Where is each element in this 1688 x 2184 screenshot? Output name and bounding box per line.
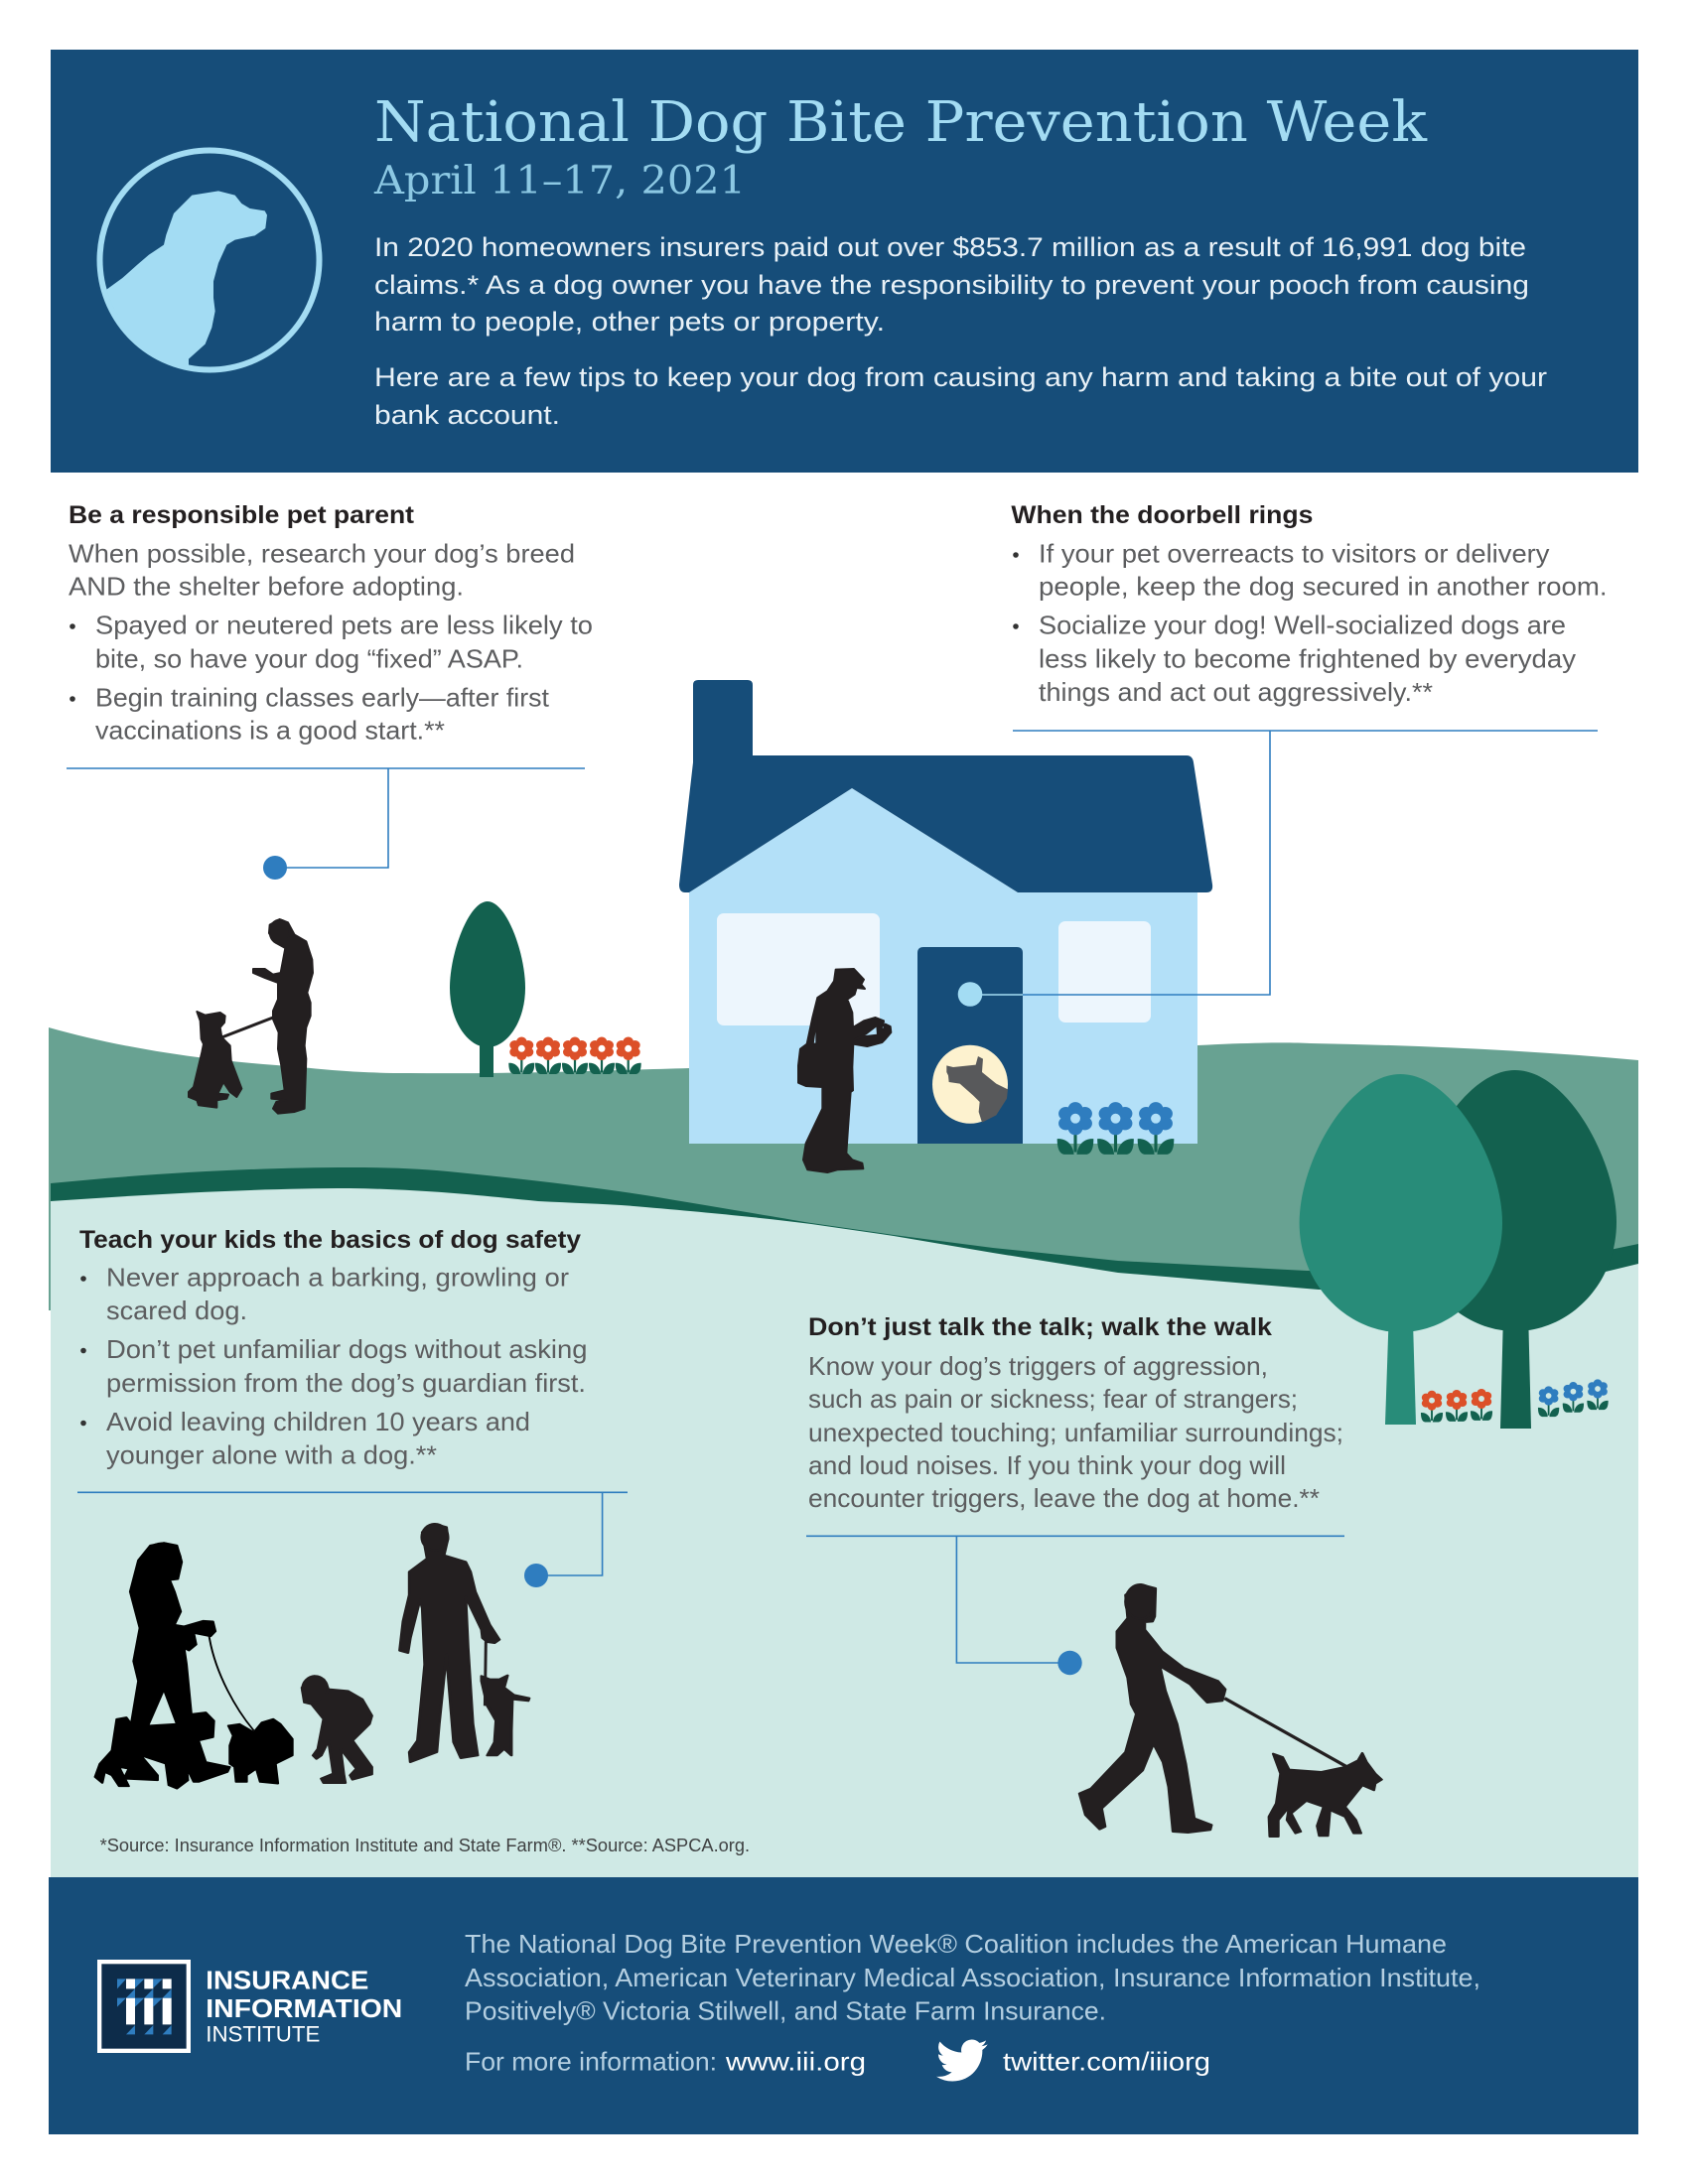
blue flowers by house [1057, 1102, 1174, 1155]
body text: younger alone with a dog.** [106, 1439, 437, 1469]
body text: unexpected touching; unfamiliar surroundings; [808, 1418, 1343, 1447]
coalition text: Positively® Victoria Stilwell, and State Farm Insurance. [465, 1995, 1106, 2025]
logo: Insurance Information Institute: INFORMATION [206, 1995, 402, 2023]
heading: When the doorbell rings [1011, 501, 1313, 529]
heading: Be a responsible pet parent [69, 501, 415, 529]
body text: Don’t pet unfamiliar dogs without asking [106, 1334, 588, 1364]
red flowers by trees [1421, 1389, 1492, 1423]
house [679, 680, 1212, 1144]
roof and chimney [679, 680, 1212, 892]
lower panel background [51, 1188, 1638, 1881]
intro text: Here are a few tips to keep your dog from causing any harm and taking a bite out of your [374, 362, 1547, 392]
silhouette: family with dogs [95, 1524, 529, 1789]
body text: Never approach a barking, growling or [106, 1263, 569, 1293]
more information line: For more information: [465, 2047, 717, 2077]
body text: If your pet overreacts to visitors or delivery [1039, 538, 1549, 568]
hill [49, 1027, 1638, 1310]
body text: people, keep the dog secured in another room. [1039, 572, 1607, 602]
small dog on leash [482, 1676, 529, 1755]
body text: When possible, research your dog’s breed [69, 538, 575, 568]
panel: be a responsible pet parent [67, 501, 593, 880]
icon: twitter bird [936, 2040, 988, 2081]
footnote: *Source: Insurance Information Institute and State Farm®. **Source: ASPCA.org. [100, 1836, 750, 1855]
silhouette: man walking dog [1079, 1584, 1382, 1837]
callout connector [806, 1536, 1344, 1675]
intro text: harm to people, other pets or property. [374, 307, 885, 337]
window right [1058, 921, 1151, 1023]
body text: Spayed or neutered pets are less likely to [95, 610, 593, 639]
logo: Insurance Information Institute: INSTITUTE [206, 2022, 320, 2047]
intro text [374, 232, 1547, 430]
footer panel [49, 1877, 1638, 2134]
twitter handle: twitter.com/iiiorg [1003, 2047, 1210, 2077]
intro text: bank account. [374, 400, 560, 430]
body text: such as pain or sickness; fear of strangers; [808, 1384, 1298, 1414]
intro text: claims.* As a dog owner you have the responsibility to prevent your pooch from causing [374, 270, 1529, 300]
window left [717, 913, 880, 1025]
header panel [51, 50, 1638, 473]
callout connector [67, 768, 585, 880]
body text: and loud noises. If you think your dog will [808, 1450, 1286, 1480]
logo mark [97, 1960, 191, 2053]
door window with dog [932, 1045, 1008, 1124]
leash [210, 1636, 254, 1730]
callout connector [77, 1492, 628, 1587]
body text: encounter triggers, leave the dog at home.** [808, 1483, 1320, 1513]
dark green band [51, 1167, 1638, 1310]
panel: when the doorbell rings [958, 501, 1607, 1007]
blue flowers by trees [1538, 1379, 1609, 1417]
door [917, 947, 1023, 1144]
body text [808, 1351, 1343, 1513]
small fluffy dog [228, 1719, 292, 1784]
more information line [465, 2047, 866, 2077]
logo: Insurance Information Institute [97, 1960, 402, 2053]
body text [69, 538, 593, 745]
body text: bite, so have your dog “fixed” ASAP. [95, 643, 523, 673]
date: April 11–17, 2021 [373, 159, 746, 204]
body text [80, 1263, 587, 1469]
body text: permission from the dog’s guardian first. [106, 1368, 586, 1398]
more information line: www.iii.org [725, 2047, 866, 2077]
red flowers by tree [508, 1037, 641, 1074]
house body [689, 788, 1197, 1144]
woman and large dog [95, 1543, 229, 1789]
body text: vaccinations is a good start.** [95, 715, 445, 745]
silhouette: mail carrier [798, 969, 891, 1172]
body text: Avoid leaving children 10 years and [106, 1407, 530, 1436]
coalition text [465, 1929, 1480, 2025]
body text: Socialize your dog! Well-socialized dogs are [1039, 610, 1566, 639]
back tree [1413, 1070, 1617, 1429]
title: National Dog Bite Prevention Week [374, 90, 1428, 155]
body text: Begin training classes early—after first [95, 683, 550, 713]
body text: AND the shelter before adopting. [69, 572, 464, 602]
body text: scared dog. [106, 1296, 247, 1325]
panel: teach your kids [77, 1226, 628, 1587]
heading: Don’t just talk the talk; walk the walk [808, 1313, 1272, 1341]
child [302, 1676, 371, 1783]
body text [1013, 538, 1607, 707]
panel: walk the walk [806, 1313, 1344, 1675]
intro text: In 2020 homeowners insurers paid out over $853.7 million as a result of 16,991 dog bite [374, 232, 1526, 262]
body text: Know your dog’s triggers of aggression, [808, 1351, 1268, 1381]
small tree [450, 901, 525, 1077]
icon: dog in circle [99, 151, 320, 369]
coalition text: Association, American Veterinary Medical Association, Insurance Information Institute, [465, 1963, 1480, 1992]
body text: less likely to become frightened by everyday [1039, 643, 1576, 673]
coalition text: The National Dog Bite Prevention Week® Coalition includes the American Humane [465, 1929, 1447, 1959]
logo text: INSURANCE [206, 1968, 368, 1995]
body text: things and act out aggressively.** [1039, 677, 1433, 707]
front tree [1300, 1074, 1502, 1425]
callout connector to peephole [958, 731, 1598, 1007]
man [400, 1524, 499, 1762]
silhouette: man training dog [189, 919, 313, 1114]
leash [482, 1641, 489, 1706]
heading: Teach your kids the basics of dog safety [79, 1226, 581, 1254]
